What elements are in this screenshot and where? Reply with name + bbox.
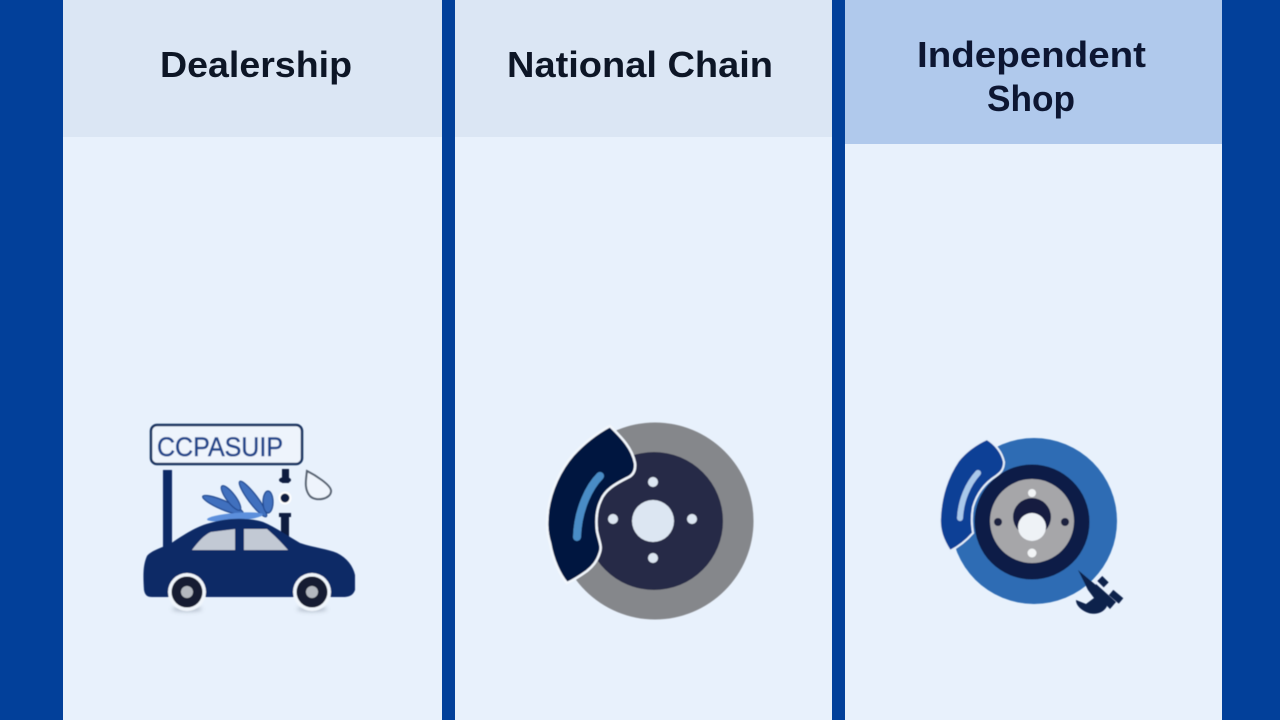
plate — [990, 479, 1074, 563]
wrench — [1076, 570, 1123, 614]
car body — [143, 519, 355, 597]
heading band: national chain — [455, 0, 832, 137]
bolts — [608, 477, 697, 563]
heading band: dealership: Dealership — [160, 44, 352, 85]
hub — [632, 500, 674, 542]
panel: dealership — [63, 0, 442, 720]
icon: blue brake disc with wrench — [940, 438, 1123, 614]
icon: car at dealership sign — [143, 425, 355, 612]
caliper — [547, 426, 635, 583]
panel: independent shop — [845, 0, 1222, 720]
sign: CCPASUIP — [157, 432, 283, 462]
heading band: independent shop — [845, 0, 1222, 144]
caliper — [940, 439, 1004, 551]
hose loop — [306, 471, 331, 499]
heading band: independent shop: Shop — [987, 78, 1075, 119]
caliper highlight — [577, 476, 600, 537]
sign — [151, 425, 302, 464]
rotor centre — [585, 452, 723, 590]
caliper highlight — [960, 473, 978, 518]
wheel shadows — [172, 606, 327, 612]
rotor — [556, 422, 754, 620]
icon: grey brake disc with dark caliper — [547, 422, 754, 620]
bolts — [994, 489, 1069, 558]
wheels — [168, 573, 331, 611]
heading band: independent shop: Independent — [917, 34, 1146, 75]
fuel pump — [278, 469, 292, 537]
foliage — [201, 479, 273, 523]
rotor — [951, 438, 1117, 604]
heading band: national chain: National Chain — [507, 44, 773, 85]
hub — [1013, 498, 1051, 536]
windows — [192, 529, 288, 550]
sign post — [163, 470, 172, 552]
heading band: dealership — [63, 0, 442, 137]
panel: national chain — [455, 0, 832, 720]
dark ring — [974, 464, 1090, 580]
